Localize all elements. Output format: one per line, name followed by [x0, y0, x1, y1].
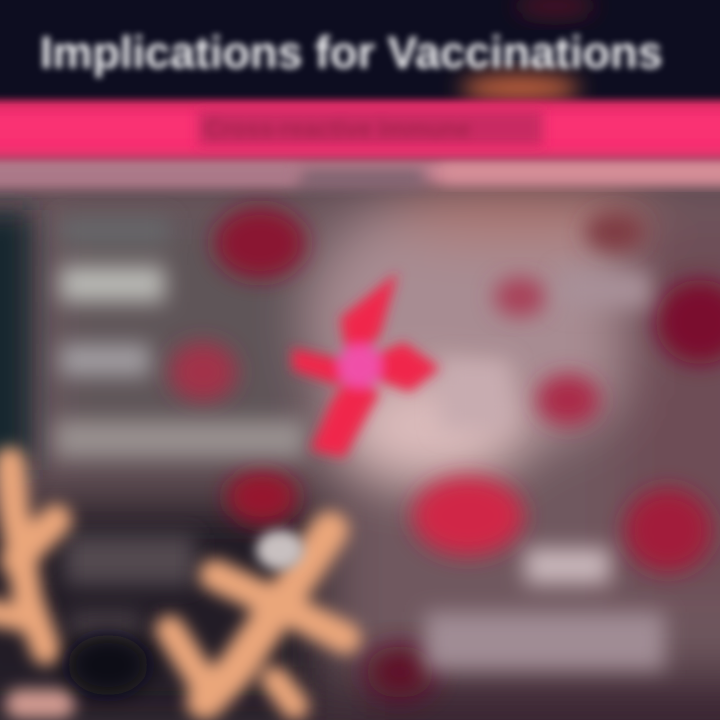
- lower band: [0, 158, 720, 188]
- red cell middle right: [536, 374, 600, 426]
- red cell lower right: [624, 488, 712, 572]
- red cell top left: [214, 207, 306, 279]
- left dark bar: [0, 210, 32, 470]
- title: Implications for Vaccinations: [40, 27, 663, 78]
- red cell lower left: [226, 469, 298, 525]
- red cell right edge: [656, 280, 720, 364]
- large red cell center: [412, 476, 524, 556]
- subtitle: Cross-reactive immune: [205, 116, 470, 143]
- top band: [0, 0, 720, 104]
- red cell bottom: [366, 646, 434, 698]
- red cell top far right: [585, 212, 645, 252]
- red cell mid left: [169, 342, 237, 402]
- red cell top right: [494, 277, 546, 317]
